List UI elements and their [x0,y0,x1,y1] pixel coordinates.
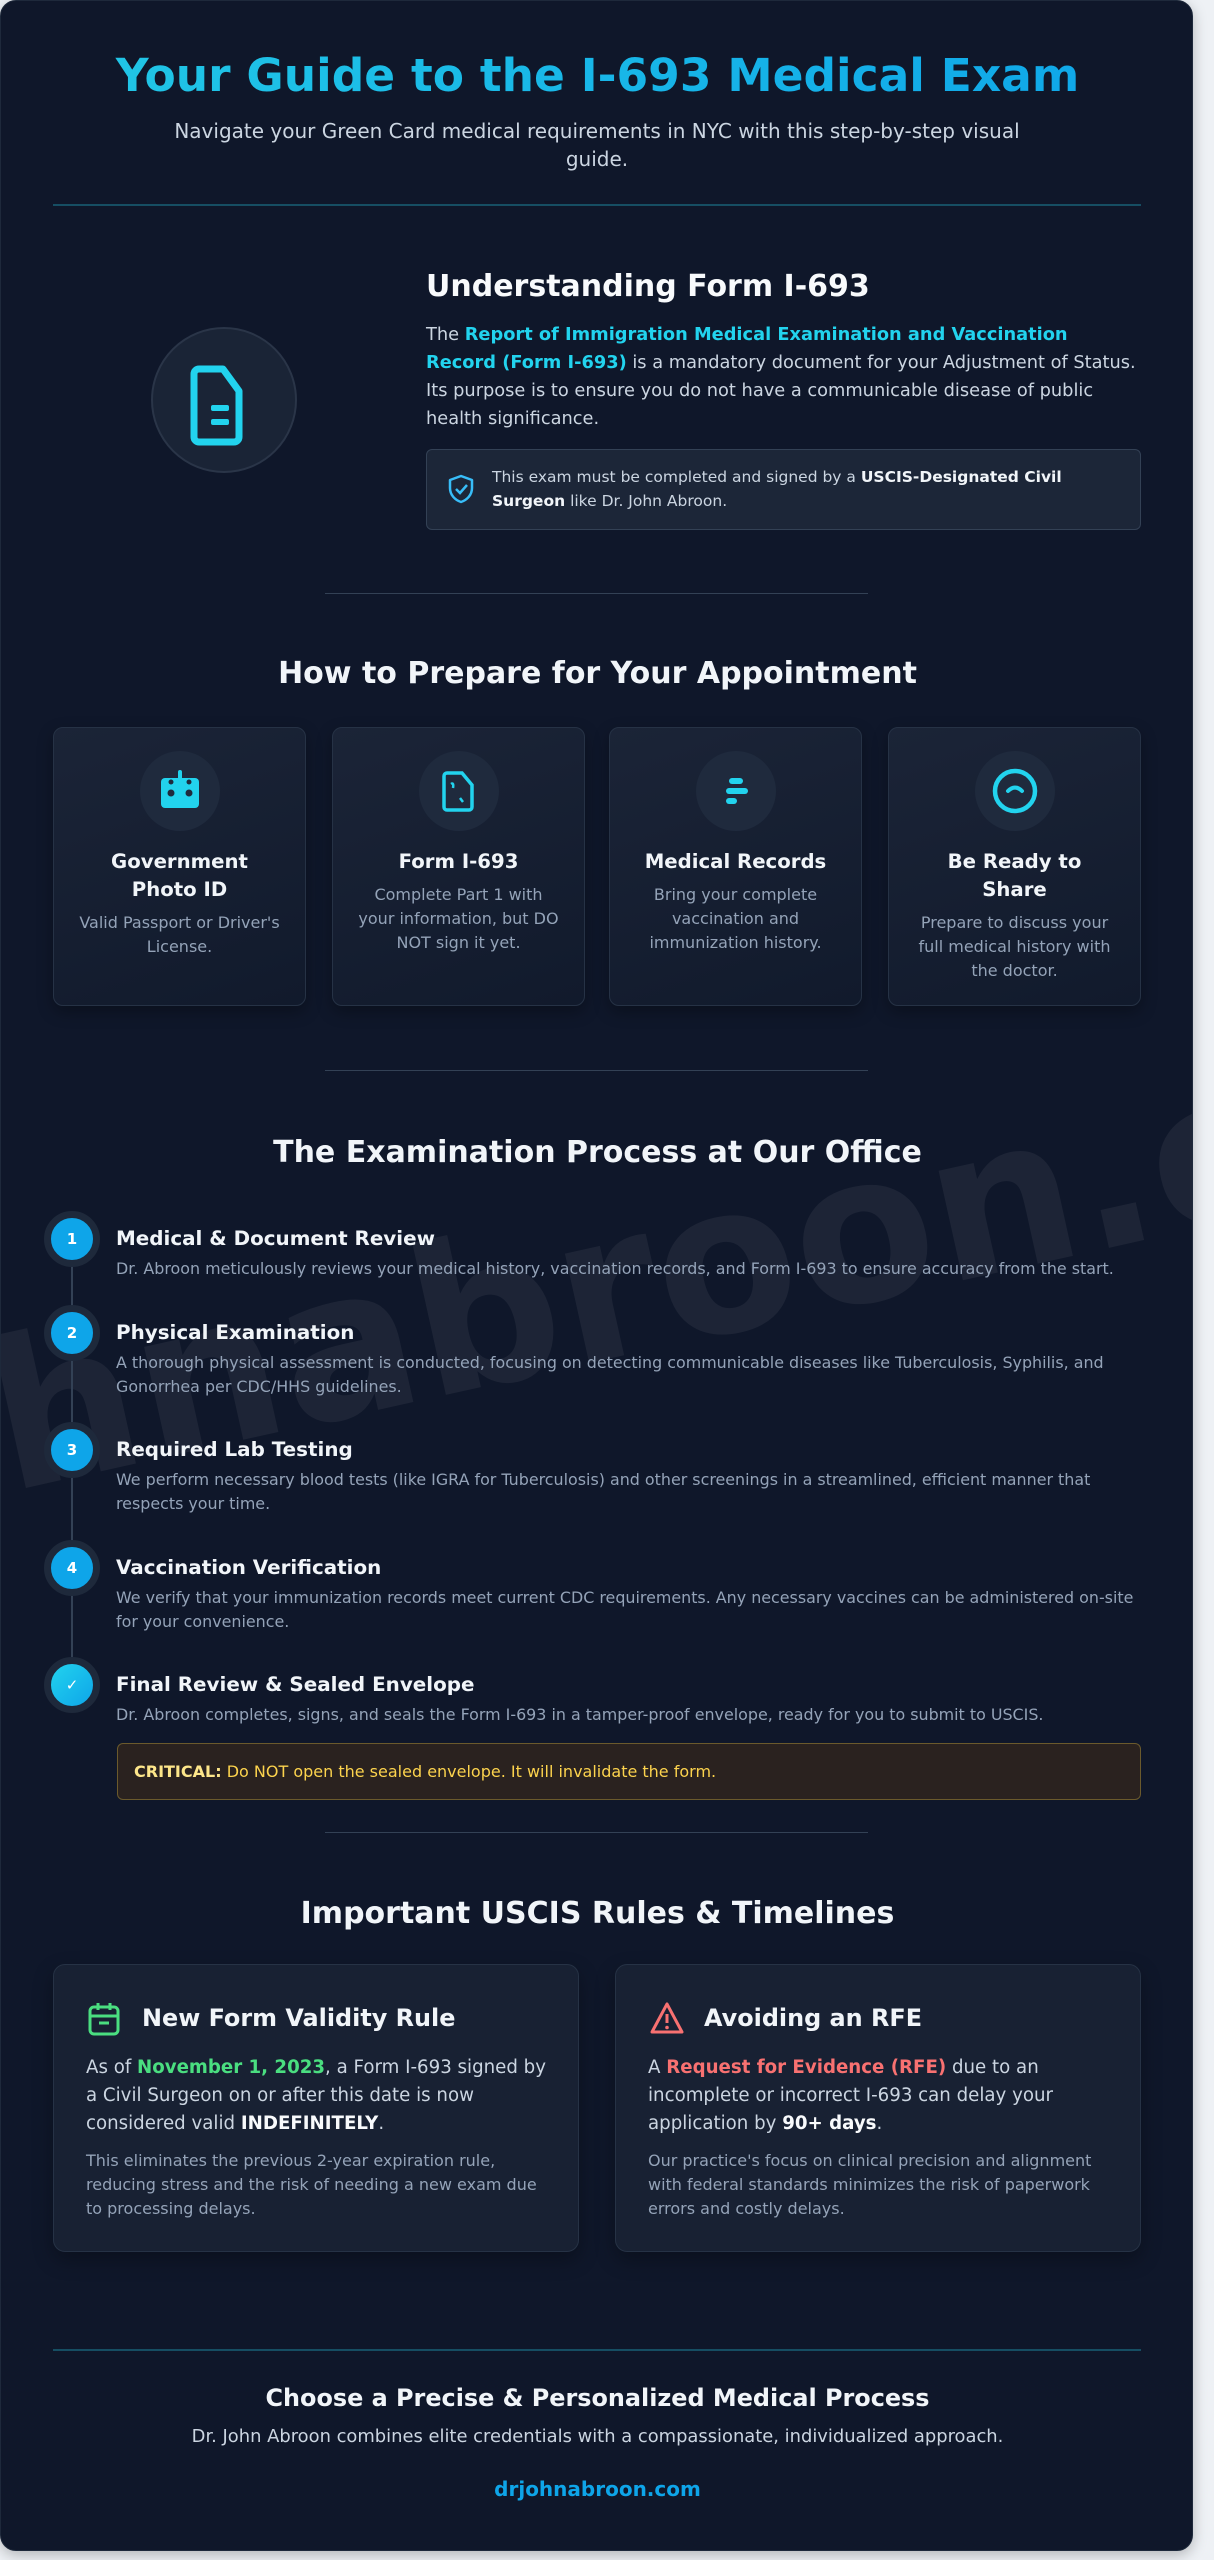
panel: photo id: Government [111,850,248,873]
panel: avoiding rfe: Our practice's focus on clinical precision and alignment with federal standards minimizes the risk of paperwork errors and costly delays. [648,2151,1091,2218]
step 3 [50,1422,1090,1513]
footer text: Dr. John Abroon combines elite credentials with a compassionate, individualized approach. [192,2426,1003,2447]
panel: medical records [609,727,862,1006]
step 2: A thorough physical assessment is conducted, focusing on detecting communicable diseases like Tuberculosis, Syphilis, and Gonorrhea per CDC/HHS guidelines. [116,1353,1104,1396]
title: Your Guide to the I-693 Medical Exam [116,49,1079,102]
panel: avoiding rfe: Avoiding an RFE [704,2004,922,2032]
step 1: Medical & Document Review [116,1227,435,1250]
timeline: steps [44,1211,1133,1724]
panel: be ready to share: Prepare to discuss your full medical history with the doctor. [918,913,1110,980]
heading: how to prepare: How to Prepare for Your Appointment [278,656,917,691]
step 5: ✓ [66,1676,78,1694]
icon: lines [696,751,776,831]
text: form description: The Report of Immigration Medical Examination and Vaccination [426,324,1068,345]
panel: medical records: Bring your complete vaccination and immunization history. [649,885,822,952]
callout: critical: CRITICAL: Do NOT open the sealed envelope. It will invalidate the form. [134,1762,716,1781]
panel: form i-693: NOT sign it yet. [396,933,521,952]
icon: id badge [140,751,220,831]
heading: rules: Important USCIS Rules & Timelines [301,1896,894,1931]
step 3: We perform necessary blood tests (like IGRA for Tuberculosis) and other screenings in a streamlined, efficient manner that respects your time. [116,1470,1090,1513]
step 3: 3 [67,1441,77,1459]
subtitle: Navigate your Green Card medical requirements in NYC with this step-by-step visual guide. [174,119,1020,171]
panel: form i-693 [332,727,585,1006]
heading: examination process: The Examination Process at Our Office [273,1135,922,1170]
panel: be ready to share: Share [982,878,1047,901]
step 1: 1 [67,1230,77,1248]
step 2: 2 [67,1324,77,1342]
step 4: Vaccination Verification [116,1556,381,1579]
footer link: drjohnabroon.com [494,2477,701,2501]
panel: validity rule: This eliminates the previous 2-year expiration rule, reducing stress and the risk of needing a new exam due to processing delays. [86,2151,537,2218]
panel: photo id: Photo ID [132,878,227,901]
text: form description [426,324,1136,429]
callout: civil surgeon [426,449,1141,530]
callout: critical [117,1743,1141,1800]
step 4 [44,1540,1133,1631]
step 2 [44,1305,1104,1396]
step 1 [44,1211,1114,1278]
heading: understanding form: Understanding Form I-693 [426,269,870,304]
panel: form i-693: your information, but DO [358,909,559,928]
panel: validity rule [53,1964,579,2252]
panel: validity rule: As of November 1, 2023, a Form I-693 signed by a Civil Surgeon on or after this date is now considered valid INDEFINITELY. [86,2057,546,2134]
panel: avoiding rfe [615,1964,1141,2252]
panel: avoiding rfe: A Request for Evidence (RFE) due to an incomplete or incorrect I-693 can delay your application by 90+ days. [648,2057,1053,2134]
step 5: Dr. Abroon completes, signs, and seals the Form I-693 in a tamper-proof envelope, ready for you to submit to USCIS. [116,1705,1043,1724]
text: form description: Record (Form I-693) is a mandatory document for your Adjustment of Status. [426,352,1136,373]
panel: be ready to share: Be Ready to [948,850,1081,873]
step 5 [44,1657,1043,1724]
icon: file [419,751,499,831]
panel: validity rule: New Form Validity Rule [142,2004,455,2032]
footer heading: Choose a Precise & Personalized Medical Process [265,2384,930,2412]
text: form description: health significance. [426,408,599,429]
step 2: Physical Examination [116,1321,354,1344]
panel: medical records: Medical Records [645,850,826,873]
step 1: Dr. Abroon meticulously reviews your medical history, vaccination records, and Form I-693 to ensure accuracy from the start. [116,1259,1114,1278]
callout: civil surgeon: This exam must be completed and signed by a USCIS-Designated Civil Surgeon like Dr. John Abroon. [492,468,1062,510]
panel: form i-693: Complete Part 1 with [374,885,543,904]
icon: warning [650,2002,684,2034]
icon: calendar [88,2003,120,2036]
panel: photo id: Valid Passport or Driver's License. [79,913,280,956]
icon: shield [448,474,474,504]
step 5: Final Review & Sealed Envelope [116,1673,475,1696]
panel: be ready to share [888,727,1141,1006]
text: form description: Its purpose is to ensure you do not have a communicable disease of public [426,380,1093,401]
panel: form i-693: Form I-693 [399,850,518,873]
step 3: Required Lab Testing [116,1438,353,1461]
icon: circle [975,751,1055,831]
step 4: We verify that your immunization records meet current CDC requirements. Any necessary vaccines can be administered on-site for your convenience. [116,1588,1133,1631]
step 4: 4 [67,1559,77,1577]
icon: document circle [151,327,297,473]
panel: photo id [53,727,306,1006]
